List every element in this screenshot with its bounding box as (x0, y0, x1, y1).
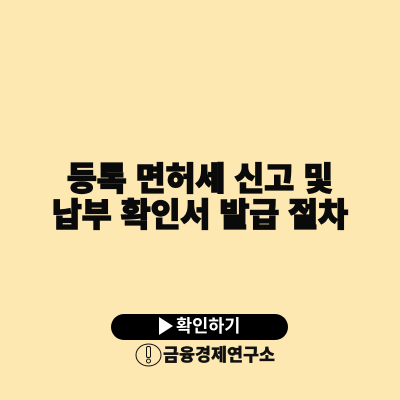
title: 납부 확인서 발급 절차 (52, 197, 348, 233)
icon: exclamation circle (136, 344, 162, 366)
button label: 확인하기 (176, 316, 240, 336)
brand name: 금융경제연구소 (163, 345, 275, 365)
button: 확인하기 (111, 314, 288, 340)
brand logo (136, 344, 275, 366)
title (52, 161, 348, 233)
title: 등록 면허세 신고 및 (67, 161, 333, 197)
icon: play triangle (159, 317, 173, 335)
